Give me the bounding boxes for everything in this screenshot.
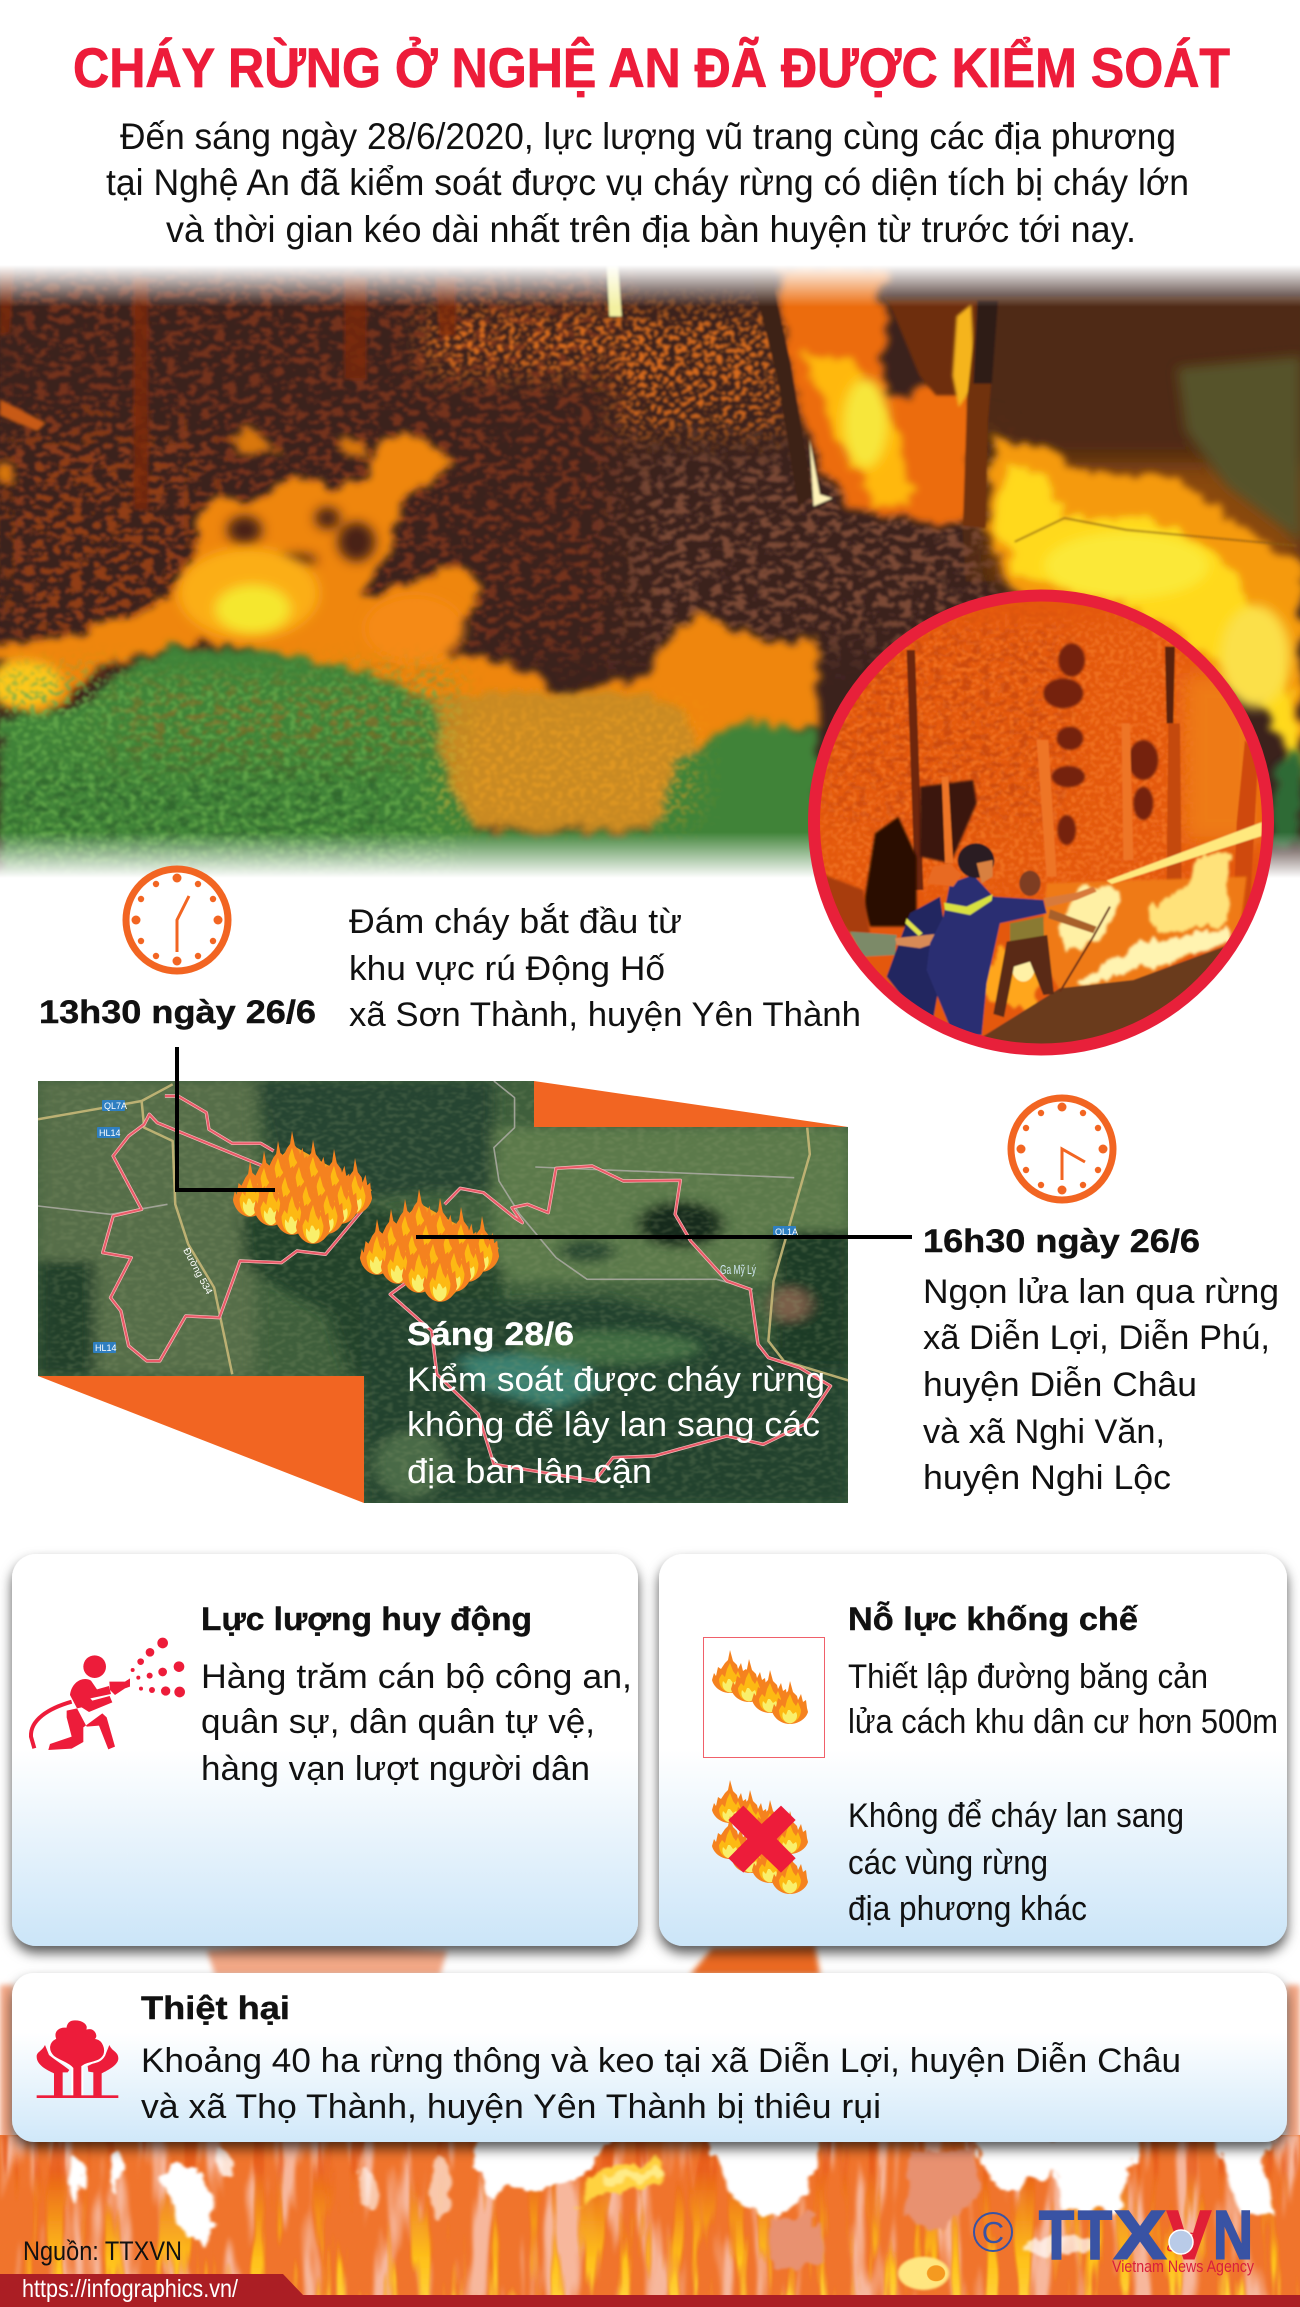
logo: TTXVN	[974, 2196, 1254, 2276]
map caption: không để lây lan sang các	[407, 1406, 820, 1444]
text: 16h30 spread: huyện Nghi Lộc	[923, 1459, 1171, 1497]
body text	[201, 1658, 632, 1788]
text: fire origin	[349, 903, 861, 1034]
label: 13h30 ngày 26/6: 13h30 ngày 26/6	[39, 994, 316, 1030]
logo: TTXVN: V	[1167, 2196, 1211, 2274]
icon: trees	[37, 2019, 118, 2098]
logo: TTXVN: T	[1039, 2196, 1074, 2274]
text: 16h30 spread: 16h30 ngày 26/6	[923, 1223, 1200, 1259]
logo: TTXVN: C	[982, 2215, 1004, 2250]
text: 16h30 spread: và xã Nghi Văn,	[923, 1413, 1165, 1451]
left and middle flame mass	[0, 431, 821, 787]
green bushes	[0, 647, 1300, 898]
satellite map: HL14	[99, 1128, 121, 1138]
footer url: https://infographics.vn/	[22, 2275, 238, 2303]
body text: quân sự, dân quân tự vệ,	[201, 1703, 595, 1741]
text: fire origin: khu vực rú Động Hố	[349, 950, 665, 988]
map caption: Kiểm soát được cháy rừng	[407, 1361, 825, 1399]
icon: firefighter with hose	[31, 1638, 185, 1750]
icon: firebreak	[704, 1638, 824, 1758]
panel: Nỗ lực khống chế	[659, 1554, 1287, 1946]
ground texture	[0, 265, 622, 660]
text: 16h30 spread	[923, 1223, 1279, 1497]
text: 16h30 spread: xã Diễn Lợi, Diễn Phú,	[923, 1319, 1270, 1357]
footer bar	[0, 2274, 1300, 2307]
body text: no spreading: Không để cháy lan sang	[848, 1797, 1184, 1835]
map caption: Sáng 28/6	[407, 1316, 574, 1352]
satellite map: Đường 534	[180, 1246, 214, 1297]
text: 16h30 spread: Ngọn lửa lan qua rừng	[923, 1273, 1279, 1311]
body text: hàng vạn lượt người dân	[201, 1750, 590, 1788]
leader line: 13h30	[177, 1047, 275, 1190]
text: fire origin: Đám cháy bắt đầu từ	[349, 903, 682, 941]
flames background footer	[0, 1945, 1300, 2300]
panel: Lực lượng huy động	[12, 1554, 638, 1946]
map panel	[38, 1081, 850, 1506]
card background	[659, 1554, 1287, 1946]
body text: Khoảng 40 ha rừng thông và keo tại xã Diễn Lợi, huyện Diễn Châu	[141, 2042, 1181, 2080]
body text: firebreak	[848, 1658, 1278, 1741]
fire patch east	[360, 1189, 499, 1302]
body text: và xã Thọ Thành, huyện Yên Thành bị thiêu rụi	[141, 2088, 881, 2126]
card background	[12, 1973, 1287, 2142]
body text: no spreading: các vùng rừng	[848, 1844, 1048, 1882]
intro paragraph: tại Nghệ An đã kiểm soát được vụ cháy rừng có diện tích bị cháy lớn	[106, 162, 1189, 203]
body text: firebreak: Thiết lập đường băng cản	[848, 1658, 1208, 1696]
icon: fire with red cross	[712, 1780, 808, 1894]
icon: clock 16h30	[1011, 1098, 1113, 1200]
heading: Nỗ lực khống chế	[848, 1601, 1138, 1637]
satellite map: QL7A	[104, 1101, 127, 1111]
heading: Thiệt hại	[141, 1990, 290, 2026]
right dim forest	[883, 297, 1300, 581]
icon: clock 13h30	[126, 869, 228, 971]
logo: TTXVN: X	[1114, 2196, 1166, 2274]
intro paragraph: Đến sáng ngày 28/6/2020, lực lượng vũ trang cùng các địa phương	[120, 116, 1176, 157]
source credit: Nguồn: TTXVN	[23, 2236, 182, 2266]
body text: no spreading: địa phương khác	[848, 1890, 1087, 1928]
orange fold triangles	[38, 1081, 848, 1503]
text: 16h30 spread: huyện Diễn Châu	[923, 1366, 1197, 1404]
heading: Lực lượng huy động	[201, 1601, 532, 1637]
circular photo: firefighters	[800, 590, 1290, 1060]
body text: Hàng trăm cán bộ công an,	[201, 1658, 632, 1696]
map caption: địa bàn lân cận	[407, 1453, 652, 1491]
right flames	[778, 265, 1300, 787]
text: fire origin: xã Sơn Thành, huyện Yên Thành	[349, 996, 861, 1034]
body text: no spreading	[848, 1797, 1184, 1928]
satellite map: Ga Mỹ Lý	[720, 1262, 756, 1277]
logo: TTXVN: T	[1078, 2196, 1112, 2274]
hero photo: forest fire	[0, 265, 1300, 898]
intro paragraph: và thời gian kéo dài nhất trên địa bàn huyện từ trước tới nay.	[166, 209, 1136, 250]
satellite map	[38, 1081, 850, 1506]
body text	[141, 2042, 1181, 2126]
satellite map: QL1A	[775, 1227, 798, 1237]
map caption	[407, 1316, 825, 1491]
fire patch west	[233, 1131, 372, 1244]
card background	[12, 1554, 638, 1946]
logo: TTXVN: N	[1213, 2196, 1253, 2274]
intro paragraph	[106, 116, 1189, 250]
logo: TTXVN: Vietnam News Agency	[1112, 2257, 1254, 2276]
leader line: 16h30	[416, 1235, 912, 1239]
panel: Thiệt hại	[12, 1973, 1287, 2142]
satellite map: HL14	[95, 1343, 117, 1353]
